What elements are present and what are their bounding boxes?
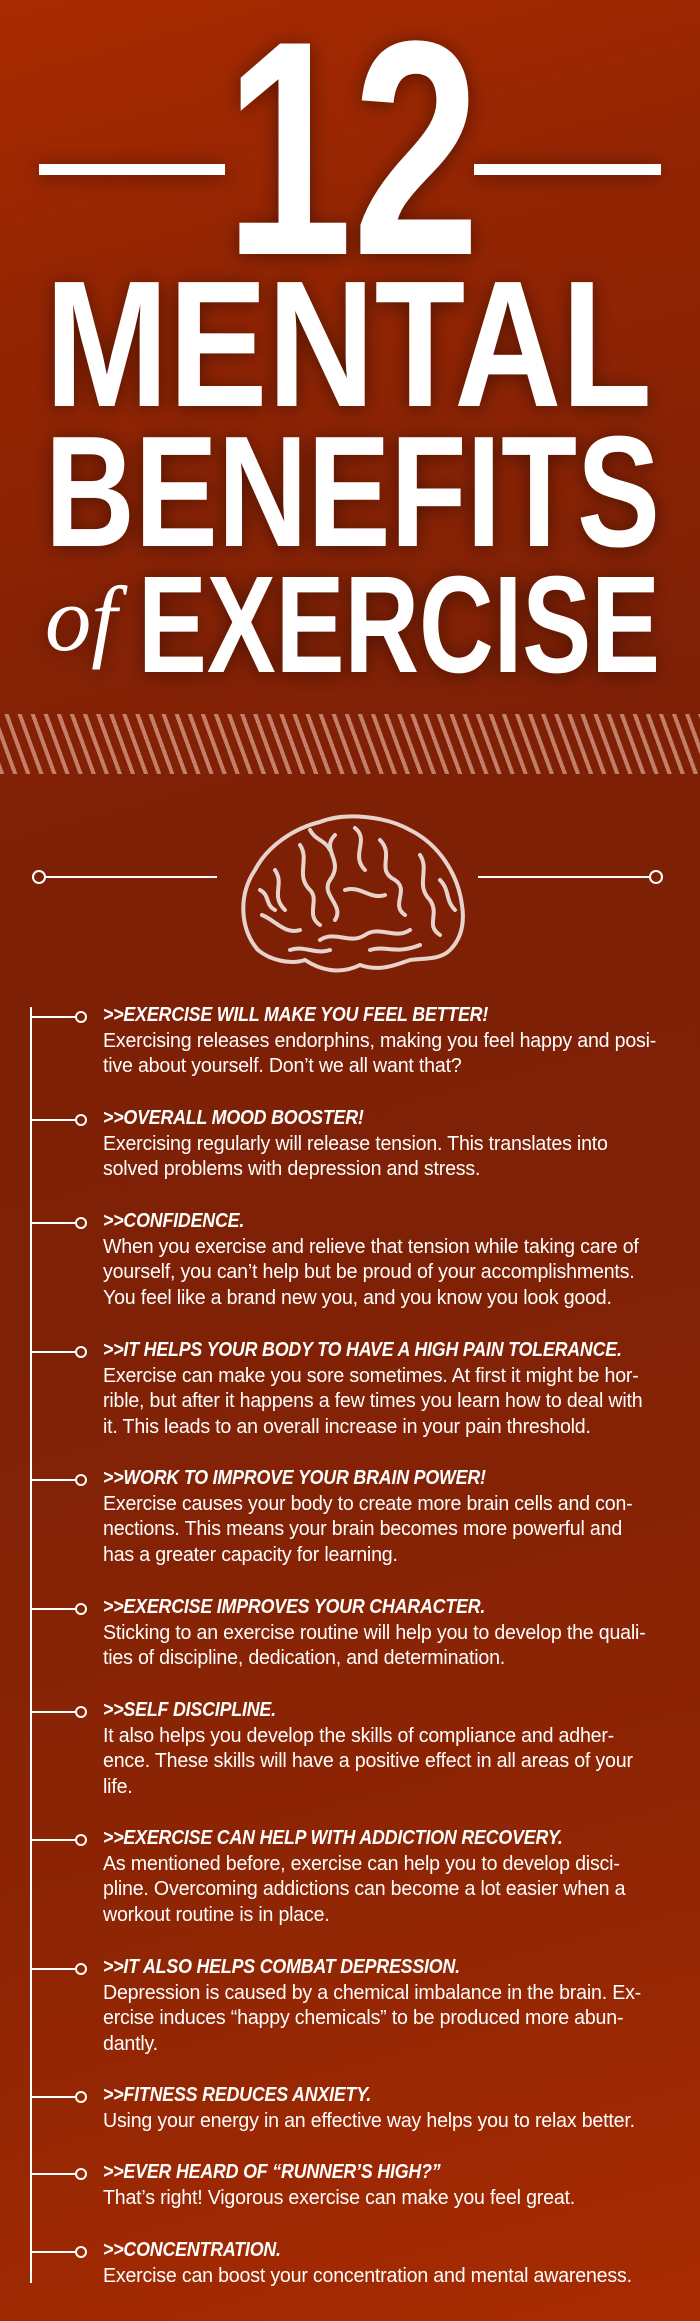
item 6: >>EXERCISE IMPROVES YOUR CHARACTER. xyxy=(103,1596,485,1618)
item 5: nections. This means your brain becomes more powerful and xyxy=(103,1518,622,1540)
item 4 xyxy=(32,1339,642,1438)
item 5: Exercise causes your body to create more brain cells and con- xyxy=(103,1493,632,1515)
item 4: Exercise can make you sore sometimes. At first it might be hor- xyxy=(103,1365,639,1387)
item 6: Sticking to an exercise routine will help you to develop the quali- xyxy=(103,1622,646,1644)
item 1: >>EXERCISE WILL MAKE YOU FEEL BETTER! xyxy=(103,1004,488,1026)
item 1: tive about yourself. Don’t we all want that? xyxy=(103,1055,462,1077)
timeline vertical line xyxy=(30,1007,32,2283)
item 3: yourself, you can’t help but be proud of your accomplishments. xyxy=(103,1261,635,1283)
item 11: That’s right! Vigorous exercise can make you feel great. xyxy=(103,2187,575,2209)
item 2: >>OVERALL MOOD BOOSTER! xyxy=(103,1107,364,1129)
item 4: it. This leads to an overall increase in your pain threshold. xyxy=(103,1416,591,1438)
brain divider xyxy=(32,814,663,972)
item 1 xyxy=(32,1004,656,1077)
item 4: rible, but after it happens a few times you learn how to deal with xyxy=(103,1390,642,1412)
item 8: >>EXERCISE CAN HELP WITH ADDICTION RECOVERY. xyxy=(103,1827,563,1849)
item 7: >>SELF DISCIPLINE. xyxy=(103,1699,276,1721)
item 12 xyxy=(32,2239,632,2287)
item 12: Exercise can boost your concentration and mental awareness. xyxy=(103,2265,632,2287)
item 7: life. xyxy=(103,1776,133,1798)
item 2: solved problems with depression and stress. xyxy=(103,1158,480,1180)
item 8 xyxy=(32,1827,626,1926)
item 10: >>FITNESS REDUCES ANXIETY. xyxy=(103,2084,371,2106)
item 4: >>IT HELPS YOUR BODY TO HAVE A HIGH PAIN TOLERANCE. xyxy=(103,1339,622,1361)
item 12: >>CONCENTRATION. xyxy=(103,2239,281,2261)
item 2 xyxy=(32,1107,608,1180)
item 3: You feel like a brand new you, and you know you look good. xyxy=(103,1287,612,1309)
item 1: Exercising releases endorphins, making you feel happy and posi- xyxy=(103,1030,656,1052)
item 8: pline. Overcoming addictions can become a lot easier when a xyxy=(103,1878,625,1900)
item 8: workout routine is in place. xyxy=(103,1904,330,1926)
item 9: ercise induces “happy chemicals” to be produced more abun- xyxy=(103,2007,623,2029)
item 5 xyxy=(32,1467,632,1566)
item 10 xyxy=(32,2084,635,2132)
item 6: ties of discipline, dedication, and determination. xyxy=(103,1647,505,1669)
item 11: >>EVER HEARD OF “RUNNER’S HIGH?” xyxy=(103,2161,441,2183)
item 3: When you exercise and relieve that tension while taking care of xyxy=(103,1236,639,1258)
item 5: >>WORK TO IMPROVE YOUR BRAIN POWER! xyxy=(103,1467,486,1489)
item 7 xyxy=(32,1699,633,1798)
item 11 xyxy=(32,2161,575,2209)
item 7: It also helps you develop the skills of compliance and adher- xyxy=(103,1725,614,1747)
item 9: >>IT ALSO HELPS COMBAT DEPRESSION. xyxy=(103,1956,460,1978)
item 3 xyxy=(32,1210,639,1309)
item 9 xyxy=(32,1956,641,2055)
header title xyxy=(34,0,666,700)
icon: brain xyxy=(243,816,463,970)
item 5: has a greater capacity for learning. xyxy=(103,1544,398,1566)
item 2: Exercising regularly will release tension. This translates into xyxy=(103,1133,608,1155)
item 8: As mentioned before, exercise can help you to develop disci- xyxy=(103,1853,620,1875)
item 7: ence. These skills will have a positive effect in all areas of your xyxy=(103,1750,633,1772)
item 9: dantly. xyxy=(103,2033,158,2055)
item 9: Depression is caused by a chemical imbalance in the brain. Ex- xyxy=(103,1982,641,2004)
item 3: >>CONFIDENCE. xyxy=(103,1210,244,1232)
item 10: Using your energy in an effective way helps you to relax better. xyxy=(103,2110,635,2132)
item 6 xyxy=(32,1596,646,1669)
stripes band xyxy=(0,714,700,774)
header title: of xyxy=(45,568,129,670)
